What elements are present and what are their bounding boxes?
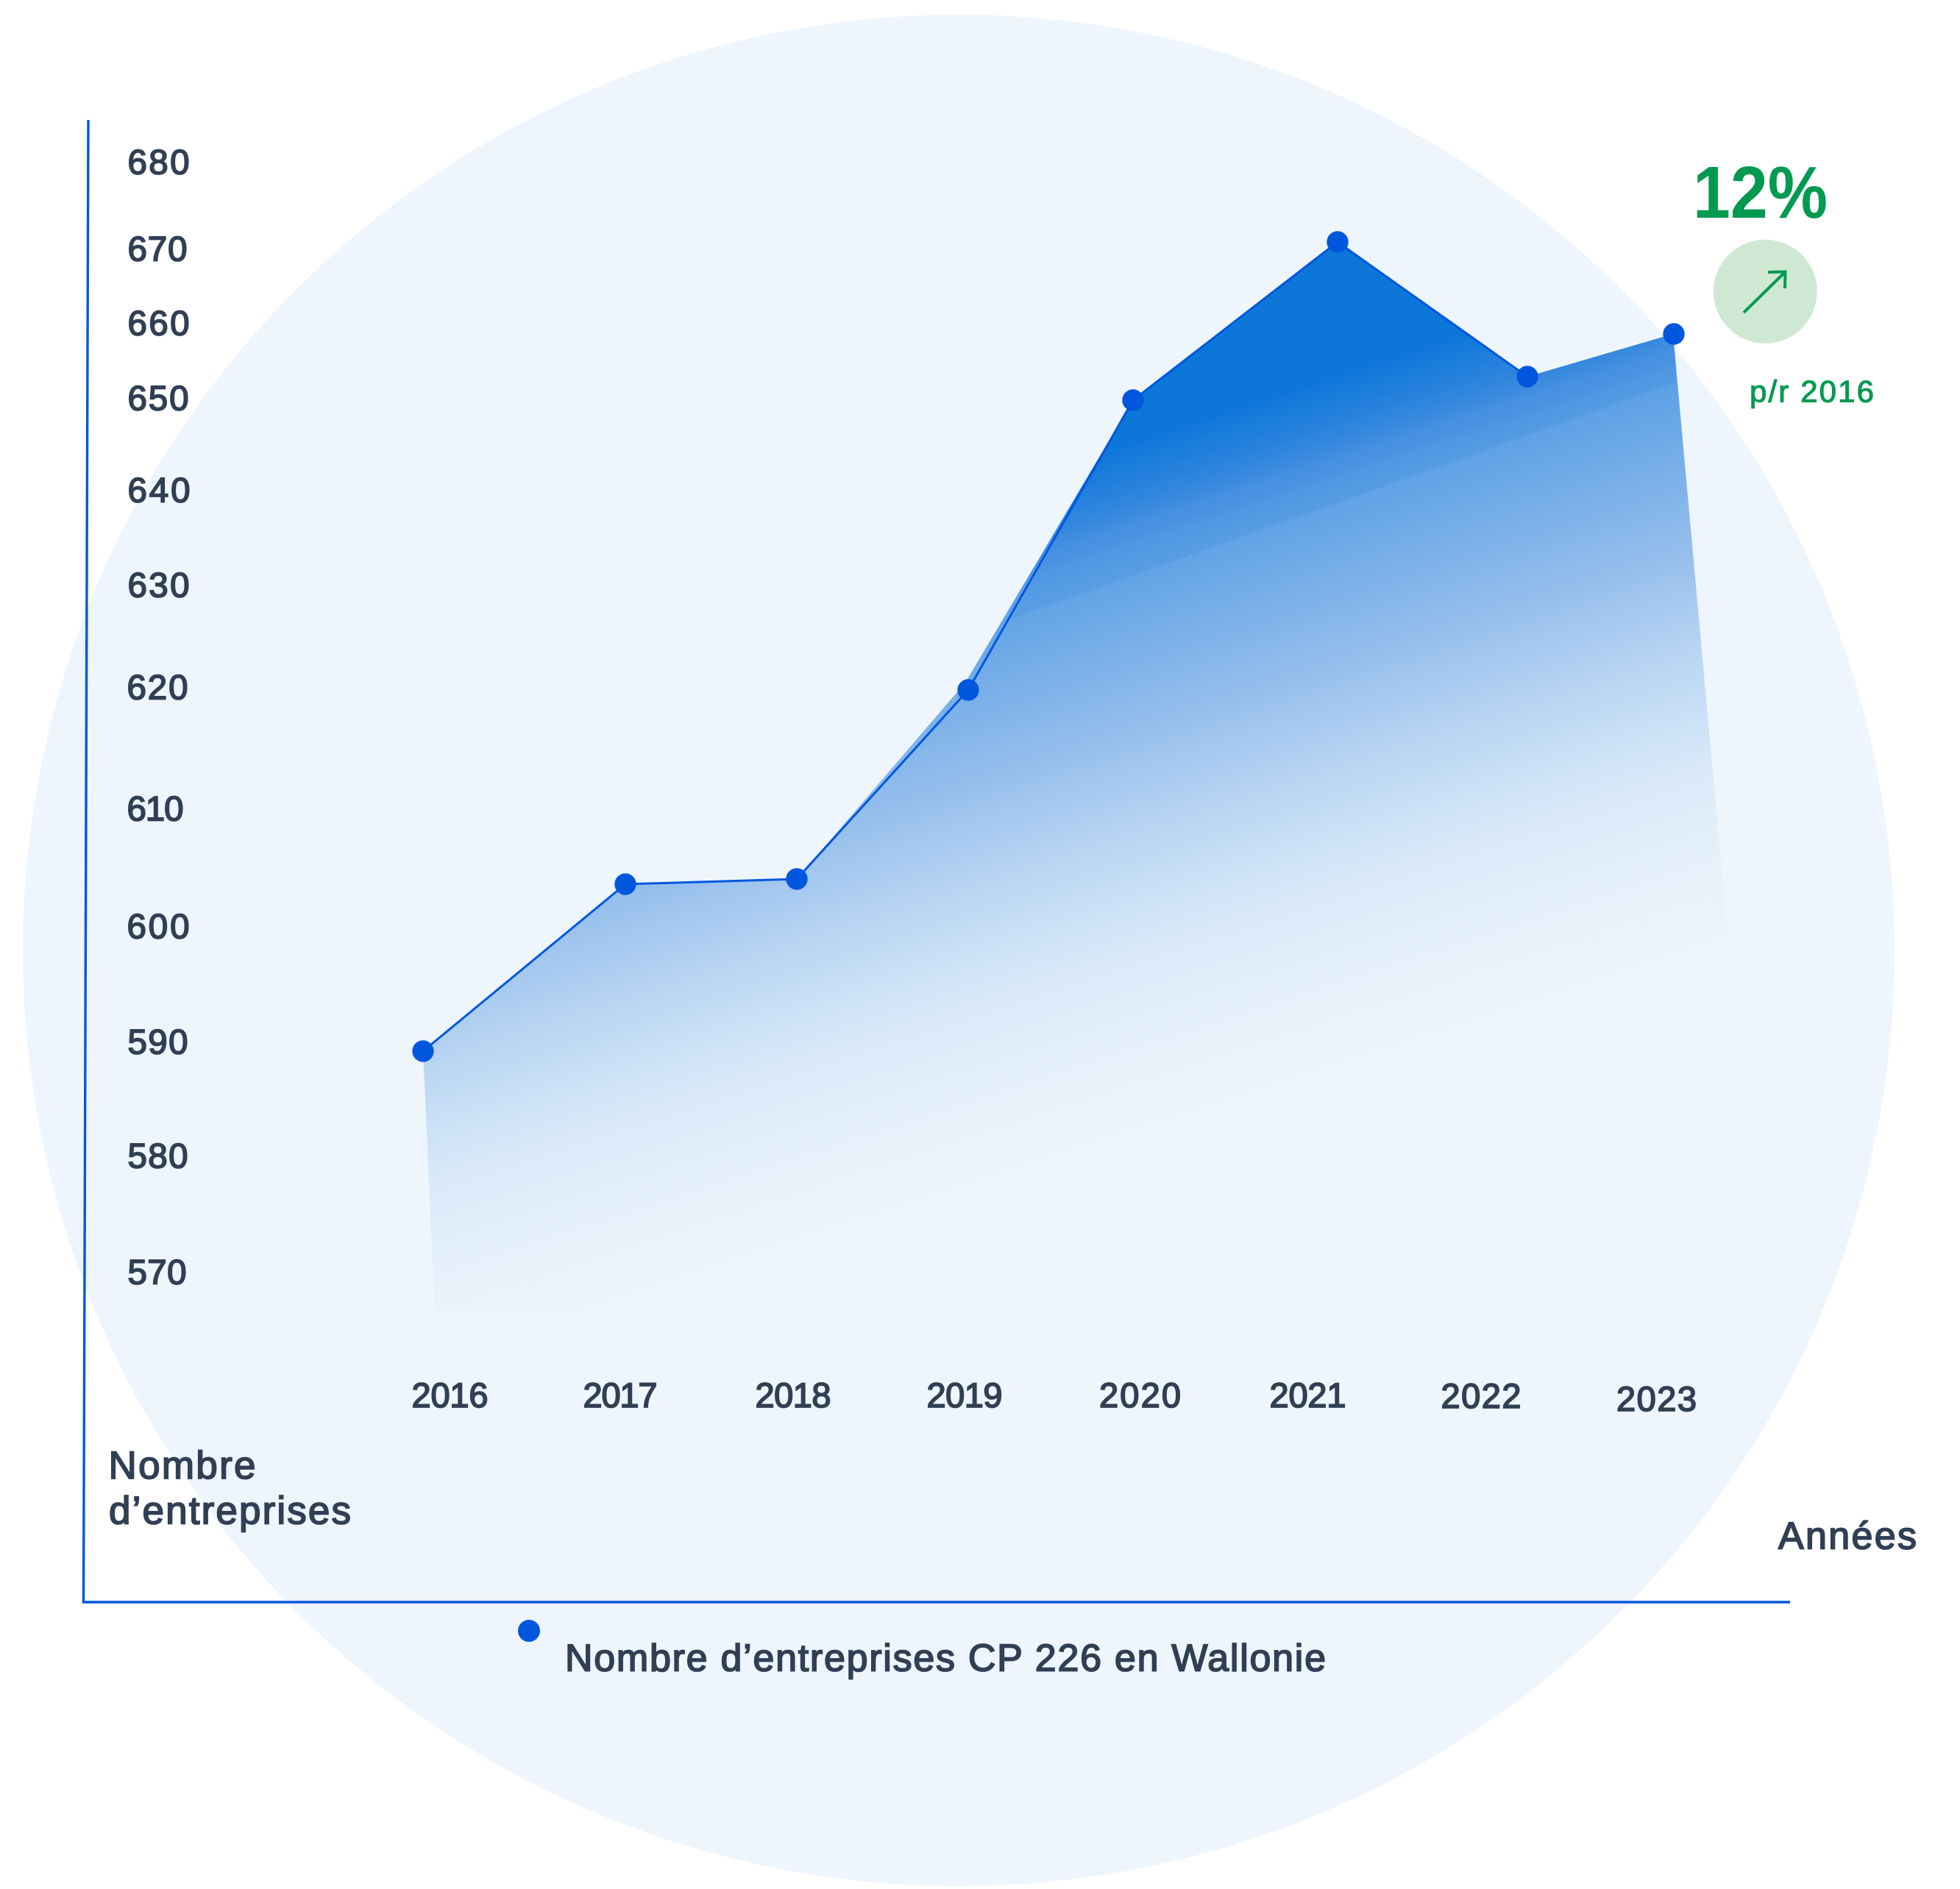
x axis labels: 2021 — [1270, 1376, 1346, 1415]
y axis labels: 590 — [128, 1022, 188, 1062]
y axis labels: 620 — [127, 668, 188, 708]
y axis title — [109, 1444, 351, 1533]
y axis labels: 660 — [128, 305, 190, 343]
y axis title: Nombre — [109, 1444, 256, 1487]
callout: comparison year: p/r 2016 — [1750, 374, 1874, 409]
y axis labels: 670 — [128, 230, 187, 269]
x axis labels: 2017 — [583, 1376, 658, 1415]
x axis title: Années — [1778, 1515, 1917, 1558]
x axis labels: 2020 — [1099, 1376, 1181, 1415]
y axis labels: 680 — [128, 143, 190, 182]
y axis title: d’entreprises — [109, 1490, 351, 1533]
y axis labels: 570 — [128, 1253, 187, 1292]
x axis labels: 2019 — [927, 1376, 1002, 1415]
area shading band near the peak — [1012, 242, 1676, 619]
x axis labels: 2016 — [412, 1376, 489, 1415]
x axis labels: 2023 — [1616, 1379, 1697, 1418]
callout: growth percentage: 12% — [1693, 152, 1828, 234]
y axis labels: 580 — [128, 1137, 188, 1175]
legend — [518, 1620, 1326, 1680]
y axis labels: 640 — [128, 471, 190, 511]
x axis labels: 2018 — [755, 1376, 831, 1415]
x axis labels — [412, 1376, 1697, 1418]
data points — [412, 231, 1685, 1062]
axes — [84, 120, 1790, 1602]
x axis labels: 2022 — [1441, 1376, 1522, 1415]
data line — [423, 242, 1527, 1051]
area fill under the line — [423, 242, 1756, 1342]
legend: Nombre d’entreprises CP 226 en Wallonie — [565, 1637, 1326, 1680]
y axis labels: 650 — [128, 380, 188, 418]
y axis labels — [127, 143, 190, 1292]
y axis labels: 600 — [127, 908, 190, 946]
y axis labels: 630 — [128, 566, 190, 605]
y axis labels: 610 — [127, 790, 184, 828]
icon: up arrow in circle — [1714, 240, 1817, 344]
